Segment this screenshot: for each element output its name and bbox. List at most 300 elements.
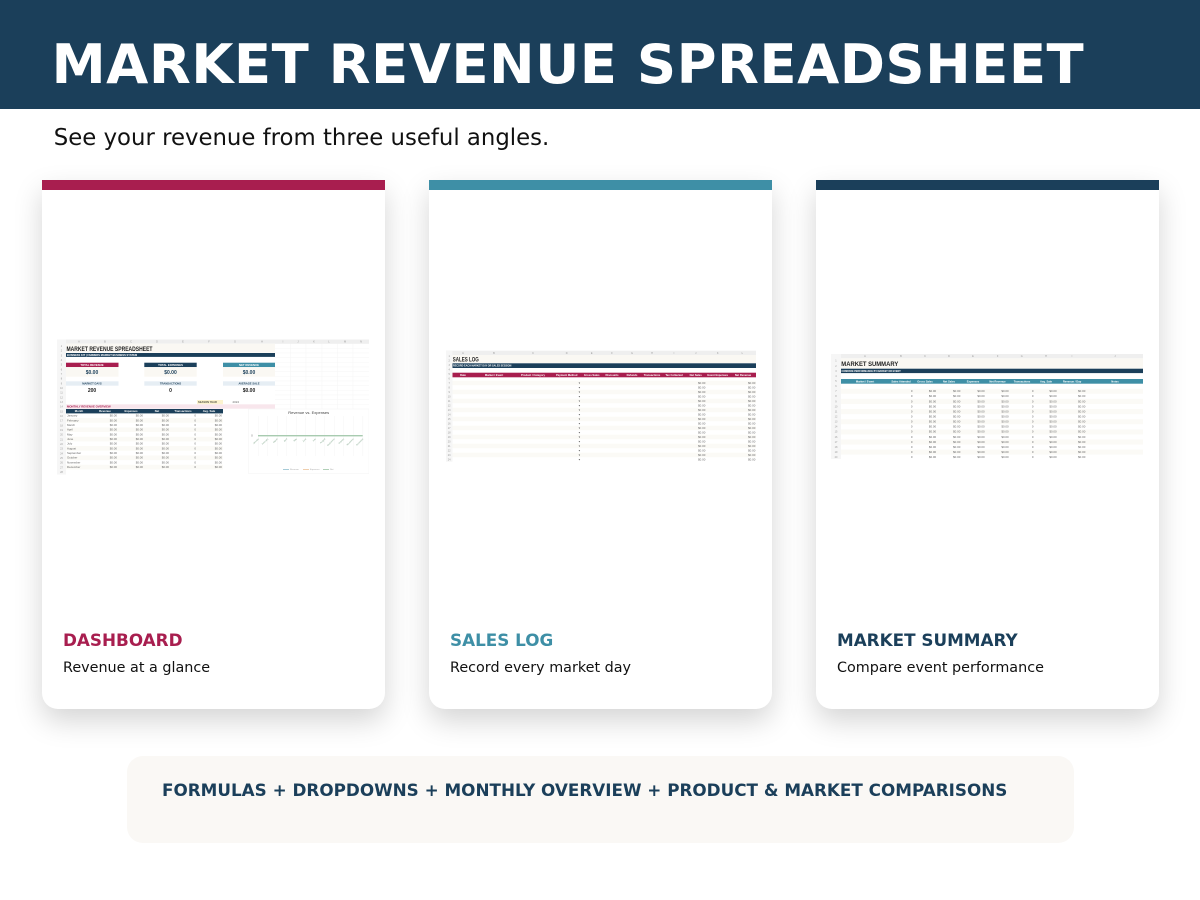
KPI: transactions: TRANSACTIONS — [160, 382, 181, 386]
spreadsheet screenshot: market summary: 2 — [835, 365, 837, 368]
monthly overview table: 0 — [194, 451, 196, 455]
table rows: market summary: 0 — [1032, 389, 1034, 393]
table rows: sales log: $0.00 — [698, 394, 706, 398]
spreadsheet screenshot: sales log: SALES LOG — [453, 357, 479, 363]
line chart: revenue vs expenses: October — [338, 437, 345, 445]
spreadsheet screenshot: dashboard: 23 — [60, 448, 63, 451]
table rows: market summary: $0.00 — [953, 450, 961, 454]
monthly overview heading: MONTHLY REVENUE OVERVIEW — [67, 405, 111, 409]
table header: market summary: Avg. Sale — [1040, 379, 1053, 383]
table rows: sales log: ▾ — [579, 404, 581, 408]
monthly overview table: $0.00 — [215, 423, 222, 427]
table header: sales log — [452, 373, 756, 377]
spreadsheet screenshot: dashboard: 21 — [60, 438, 63, 441]
spreadsheet screenshot: sales log: 3 — [449, 364, 451, 367]
table rows: market summary: $0.00 — [1078, 430, 1086, 434]
line chart: revenue vs expenses — [248, 409, 369, 474]
table header: market summary: Transactions — [1014, 379, 1031, 383]
table rows: market summary: $0.00 — [953, 435, 961, 439]
table rows: sales log: $0.00 — [748, 458, 756, 462]
table header: sales log: Net Revenue — [735, 373, 752, 377]
spreadsheet screenshot: market summary: MARKET SUMMARY — [841, 362, 898, 368]
monthly overview table: $0.00 — [110, 451, 117, 455]
table rows: sales log: $0.00 — [748, 453, 756, 457]
table rows: sales log: $0.00 — [698, 444, 706, 448]
spreadsheet screenshot: dashboard: 12 — [60, 396, 63, 399]
monthly overview table: $0.00 — [215, 460, 222, 464]
spreadsheet screenshot: sales log: 22 — [448, 450, 451, 452]
table rows: market summary: $0.00 — [953, 425, 961, 429]
monthly overview table: 0 — [194, 432, 196, 436]
spreadsheet screenshot: sales log: 4 — [449, 368, 451, 372]
spreadsheet screenshot: dashboard: 3 — [61, 354, 63, 357]
monthly overview table: 0 — [194, 465, 196, 469]
monthly overview table: $0.00 — [162, 432, 169, 436]
spreadsheet screenshot: sales log: 17 — [448, 427, 451, 430]
spreadsheet screenshot: sales log: 5 — [449, 373, 451, 376]
monthly overview table: $0.00 — [215, 432, 222, 436]
KPI: market days: MARKET DAYS — [82, 382, 102, 386]
table rows: market summary: $0.00 — [977, 409, 985, 413]
table rows: market summary: $0.00 — [977, 450, 985, 454]
table rows: sales log: $0.00 — [698, 453, 706, 457]
monthly overview table: $0.00 — [162, 451, 169, 455]
table rows: market summary: $0.00 — [1001, 414, 1009, 418]
season year selector — [197, 400, 239, 404]
spreadsheet screenshot: sales log: 13 — [448, 409, 451, 412]
spreadsheet screenshot: dashboard: 4 — [61, 359, 63, 362]
table rows: market summary: $0.00 — [953, 414, 961, 418]
spreadsheet screenshot: sales log: 20 — [448, 440, 451, 444]
monthly overview table: 0 — [194, 437, 196, 441]
KPI: average sale: $0.00 — [243, 388, 255, 394]
spreadsheet screenshot: sales log: K — [717, 352, 719, 355]
monthly overview table: June — [67, 437, 74, 441]
table rows: market summary: $0.00 — [977, 414, 985, 418]
table rows: sales log: $0.00 — [698, 435, 706, 439]
table rows: market summary: $0.00 — [929, 440, 937, 444]
monthly overview table: $0.00 — [110, 418, 117, 422]
spreadsheet screenshot: market summary: C — [924, 355, 926, 358]
table rows: sales log: $0.00 — [748, 386, 756, 390]
table rows: market summary: $0.00 — [1078, 420, 1086, 424]
table header: market summary: Notes — [1111, 379, 1119, 383]
spreadsheet screenshot: dashboard: N — [360, 341, 362, 344]
table rows: market summary: $0.00 — [977, 455, 985, 459]
panel accent bar: sales log — [429, 180, 772, 190]
table rows: sales log: $0.00 — [698, 430, 706, 434]
table header: market summary: Expenses — [967, 379, 980, 383]
monthly overview table: $0.00 — [136, 451, 143, 455]
table rows: market summary: $0.00 — [1049, 430, 1057, 434]
table rows: sales log: ▾ — [579, 440, 581, 444]
monthly overview table: $0.00 — [110, 460, 117, 464]
panel: sales log — [429, 180, 772, 709]
monthly overview table: $0.00 — [110, 442, 117, 446]
spreadsheet screenshot: sales log: 8 — [449, 386, 451, 390]
monthly overview table: $0.00 — [136, 418, 143, 422]
monthly overview table: $0.00 — [110, 437, 117, 441]
table rows: sales log: ▾ — [579, 390, 581, 394]
monthly overview table: $0.00 — [110, 414, 117, 418]
spreadsheet screenshot: market summary: G — [1021, 355, 1023, 358]
table rows: sales log: $0.00 — [748, 426, 756, 430]
spreadsheet screenshot: dashboard: 15 — [60, 410, 63, 413]
table rows: market summary: $0.00 — [1049, 409, 1057, 413]
table rows: market summary: $0.00 — [977, 440, 985, 444]
spreadsheet screenshot: market summary: 6 — [835, 385, 837, 388]
spreadsheet screenshot: sales log: J — [695, 352, 697, 355]
table rows: market summary: $0.00 — [1049, 420, 1057, 424]
monthly overview table: May — [67, 432, 73, 436]
table rows: market summary: $0.00 — [929, 445, 937, 449]
table rows: market summary: $0.00 — [1049, 450, 1057, 454]
KPI: net revenue: NET REVENUE — [239, 363, 259, 367]
KPI: net revenue — [223, 363, 275, 377]
table rows: market summary: 0 — [911, 399, 913, 403]
table rows: market summary: $0.00 — [929, 409, 937, 413]
monthly overview table: 0 — [194, 418, 196, 422]
table header: market summary — [841, 379, 1143, 384]
table rows: market summary: $0.00 — [1001, 440, 1009, 444]
footer feature strip — [127, 756, 1074, 843]
spreadsheet screenshot: market summary: 4 — [835, 375, 837, 378]
monthly overview heading — [66, 404, 275, 409]
spreadsheet screenshot: sales log: RECORD EACH MARKET DAY OR SALES SESSION — [453, 365, 512, 368]
spreadsheet screenshot: market summary: 7 — [835, 390, 837, 393]
table rows: market summary: $0.00 — [953, 440, 961, 444]
spreadsheet screenshot: market summary: 8 — [835, 395, 837, 398]
table rows: market summary: 0 — [911, 440, 913, 444]
monthly overview table: $0.00 — [110, 432, 117, 436]
table header: market summary: Gross Sales — [917, 379, 933, 383]
season year selector: SEASON YEAR — [198, 400, 217, 404]
table rows: market summary: $0.00 — [929, 425, 937, 429]
monthly overview table: $0.00 — [162, 460, 169, 464]
table rows: market summary: $0.00 — [1078, 404, 1086, 408]
table rows: market summary: 0 — [1032, 409, 1034, 413]
monthly overview table: 0 — [194, 460, 196, 464]
table rows: market summary: $0.00 — [1001, 450, 1009, 454]
table rows: market summary: $0.00 — [929, 455, 937, 459]
spreadsheet screenshot: market summary: 20 — [835, 456, 838, 459]
line chart: revenue vs expenses: May — [294, 438, 298, 442]
monthly overview table: $0.00 — [215, 418, 222, 422]
table rows: sales log: $0.00 — [748, 381, 756, 385]
panel accent bar: dashboard — [42, 180, 385, 190]
table rows: market summary: $0.00 — [1078, 450, 1086, 454]
monthly overview table: $0.00 — [136, 432, 143, 436]
table rows: sales log: ▾ — [579, 386, 581, 390]
table rows: market summary: $0.00 — [953, 445, 961, 449]
monthly overview table: $0.00 — [110, 465, 117, 469]
table rows: market summary: $0.00 — [1001, 455, 1009, 459]
table header: sales log: Net Sales — [690, 373, 702, 377]
table rows: sales log: $0.00 — [748, 394, 756, 398]
table rows: market summary: 0 — [1032, 414, 1034, 418]
table rows: sales log: ▾ — [579, 412, 581, 416]
KPI: total expenses: $0.00 — [164, 370, 177, 376]
table rows: market summary: $0.00 — [1001, 430, 1009, 434]
table header: sales log: Gross Sales — [584, 373, 600, 377]
spreadsheet screenshot: dashboard: 25 — [60, 457, 63, 460]
line chart: revenue vs expenses: November — [346, 437, 355, 446]
table rows: market summary: $0.00 — [1049, 440, 1057, 444]
spreadsheet screenshot: market summary: 1 — [835, 360, 837, 363]
table rows: market summary: $0.00 — [1078, 455, 1086, 459]
table rows: market summary: $0.00 — [1049, 399, 1057, 403]
table rows: market summary: $0.00 — [953, 409, 961, 413]
monthly overview table: $0.00 — [162, 437, 169, 441]
table rows: market summary: $0.00 — [1078, 435, 1086, 439]
table header: sales log: Market / Event — [485, 373, 503, 377]
spreadsheet screenshot: sales log: 1 — [449, 355, 451, 358]
monthly overview table: $0.00 — [136, 428, 143, 432]
spreadsheet screenshot: dashboard: E — [182, 341, 184, 344]
spreadsheet screenshot: dashboard: F — [208, 341, 210, 344]
monthly overview table: $0.00 — [136, 465, 143, 469]
monthly overview table: November — [67, 460, 80, 464]
table rows: market summary: 0 — [1032, 425, 1034, 429]
monthly overview table: $0.00 — [162, 456, 169, 460]
table header: sales log: Event Expenses — [707, 373, 729, 377]
monthly overview table: February — [67, 418, 79, 422]
table rows: market summary: $0.00 — [953, 404, 961, 408]
spreadsheet screenshot: market summary: COMPARE PERFORMANCE BY MARKET OR EVENT — [842, 370, 901, 373]
spreadsheet screenshot: market summary: F — [997, 355, 999, 358]
KPI: market days — [66, 381, 118, 394]
table rows: market summary: 0 — [911, 420, 913, 424]
KPI: market days: 200 — [88, 388, 96, 394]
KPI: total revenue: TOTAL REVENUE — [80, 363, 104, 367]
table rows: sales log: $0.00 — [698, 448, 706, 452]
spreadsheet screenshot: sales log: 21 — [448, 445, 451, 448]
spreadsheet screenshot: dashboard: L — [328, 341, 330, 344]
spreadsheet screenshot: sales log — [446, 350, 756, 462]
table rows: market summary: $0.00 — [1001, 399, 1009, 403]
table header: market summary: Net Sales — [943, 379, 956, 383]
spreadsheet screenshot: dashboard: 16 — [60, 415, 63, 418]
spreadsheet screenshot: dashboard: 24 — [60, 452, 63, 455]
spreadsheet screenshot: sales log: C — [532, 352, 534, 355]
KPI: total revenue — [66, 363, 118, 377]
table rows: sales log: ▾ — [579, 453, 581, 457]
table rows: market summary: 0 — [911, 430, 913, 434]
spreadsheet screenshot: market summary: 13 — [835, 420, 838, 424]
spreadsheet screenshot: sales log: G — [631, 352, 633, 355]
spreadsheet screenshot: dashboard: A — [78, 341, 80, 344]
spreadsheet screenshot: market summary: 17 — [835, 441, 838, 444]
spreadsheet screenshot: dashboard: BUSINESS KIT | FARMERS MARKET BUSINESS SYSTEM — [67, 353, 137, 357]
KPI: transactions — [144, 381, 197, 394]
spreadsheet screenshot: dashboard: 2 — [61, 350, 63, 353]
table rows: market summary: $0.00 — [929, 435, 937, 439]
table rows: sales log: ▾ — [579, 394, 581, 398]
spreadsheet screenshot: sales log: D — [566, 352, 568, 355]
spreadsheet screenshot: market summary — [831, 354, 1143, 459]
table header: market summary: Revenue / Day — [1063, 379, 1082, 383]
table rows: market summary: $0.00 — [977, 394, 985, 398]
table rows: sales log: $0.00 — [748, 399, 756, 403]
table rows: market summary: 0 — [1032, 445, 1034, 449]
table rows: market summary: $0.00 — [929, 430, 937, 434]
monthly overview table: $0.00 — [215, 442, 222, 446]
description: sales log: Record every market day — [450, 660, 631, 676]
spreadsheet screenshot: dashboard: G — [234, 341, 236, 344]
monthly overview table: August — [67, 446, 76, 450]
KPI: transactions: 0 — [169, 388, 172, 394]
table rows: market summary: $0.00 — [1078, 399, 1086, 403]
spreadsheet screenshot: market summary: 15 — [835, 431, 838, 434]
spreadsheet screenshot: dashboard: D — [156, 341, 158, 344]
table rows: market summary: 0 — [911, 455, 913, 459]
table rows: sales log: ▾ — [579, 422, 581, 426]
table rows: sales log: $0.00 — [748, 444, 756, 448]
table rows: sales log: $0.00 — [698, 408, 706, 412]
table rows: market summary: $0.00 — [953, 394, 961, 398]
monthly overview table: $0.00 — [215, 465, 222, 469]
table rows: market summary: $0.00 — [1078, 394, 1086, 398]
monthly overview table: $0.00 — [215, 446, 222, 450]
table rows: market summary: $0.00 — [929, 399, 937, 403]
monthly overview table: $0.00 — [162, 414, 169, 418]
table rows: market summary: $0.00 — [953, 430, 961, 434]
table rows: market summary: 0 — [911, 450, 913, 454]
table rows: market summary: $0.00 — [1049, 425, 1057, 429]
monthly overview table: $0.00 — [136, 456, 143, 460]
description: dashboard: Revenue at a glance — [63, 660, 210, 676]
KPI: net revenue: $0.00 — [243, 370, 255, 376]
table rows: market summary: $0.00 — [1078, 425, 1086, 429]
table rows: market summary: $0.00 — [977, 420, 985, 424]
spreadsheet screenshot: sales log: A — [462, 352, 464, 355]
table rows: market summary: $0.00 — [1001, 425, 1009, 429]
spreadsheet screenshot: sales log: 6 — [449, 378, 451, 380]
table rows: market summary: 0 — [911, 389, 913, 393]
line chart: revenue vs expenses: March — [272, 437, 279, 444]
monthly overview table: $0.00 — [215, 451, 222, 455]
table rows: market summary: $0.00 — [1049, 445, 1057, 449]
spreadsheet screenshot: market summary: 12 — [835, 416, 838, 418]
spreadsheet screenshot: dashboard: 14 — [60, 406, 63, 409]
table rows: market summary: $0.00 — [929, 404, 937, 408]
table rows: market summary: $0.00 — [953, 389, 961, 393]
spreadsheet screenshot: market summary: 10 — [835, 405, 838, 408]
description: market summary: Compare event performance — [837, 660, 1044, 676]
footer text: FORMULAS + DROPDOWNS + MONTHLY OVERVIEW + PRODUCT & MARKET COMPARISONS — [162, 780, 1007, 800]
spreadsheet screenshot: sales log: 9 — [449, 391, 451, 394]
spreadsheet screenshot: market summary: H — [1045, 355, 1047, 358]
table rows: sales log: $0.00 — [748, 435, 756, 439]
spreadsheet screenshot: dashboard: 13 — [60, 401, 63, 404]
spreadsheet screenshot: sales log: 11 — [448, 400, 451, 403]
monthly overview table: Transactions — [174, 409, 192, 413]
spreadsheet screenshot: market summary: I — [1072, 355, 1073, 358]
panel: market summary — [816, 180, 1159, 709]
table rows: sales log: $0.00 — [748, 404, 756, 408]
spreadsheet screenshot: market summary: 16 — [835, 436, 838, 439]
line chart: revenue vs expenses: December — [356, 437, 365, 446]
spreadsheet screenshot: dashboard: 22 — [60, 443, 63, 446]
KPI: total expenses: TOTAL EXPENSES — [158, 363, 183, 367]
table rows: sales log: ▾ — [579, 426, 581, 430]
line chart: revenue vs expenses: 0 — [251, 434, 253, 438]
spreadsheet screenshot: sales log: 15 — [448, 418, 451, 421]
table rows: market summary: 0 — [1032, 404, 1034, 408]
spreadsheet screenshot: dashboard: 26 — [60, 462, 63, 465]
monthly overview table: December — [67, 465, 80, 469]
table header: sales log: Product / Category — [521, 373, 546, 377]
spreadsheet screenshot: dashboard: 9 — [61, 382, 63, 385]
spreadsheet screenshot: market summary: E — [972, 355, 974, 358]
table rows: market summary: $0.00 — [977, 435, 985, 439]
table rows: sales log: $0.00 — [748, 440, 756, 444]
spreadsheet screenshot: dashboard: 7 — [61, 373, 63, 376]
spreadsheet screenshot: sales log: I — [674, 352, 675, 355]
table rows: market summary: 0 — [911, 409, 913, 413]
spreadsheet screenshot: sales log: 12 — [448, 404, 451, 408]
monthly overview table: January — [67, 414, 78, 418]
table header: market summary: Market / Event — [856, 379, 874, 383]
spreadsheet screenshot: market summary: D — [948, 355, 950, 358]
table rows: market summary: $0.00 — [929, 450, 937, 454]
spreadsheet screenshot: dashboard: 28 — [60, 471, 63, 474]
KPI: total expenses — [144, 363, 197, 377]
spreadsheet screenshot: dashboard: C — [130, 341, 132, 344]
monthly overview table: $0.00 — [136, 460, 143, 464]
table rows: market summary: $0.00 — [1049, 394, 1057, 398]
spreadsheet screenshot: market summary: A — [864, 355, 866, 358]
monthly overview table: 0 — [194, 456, 196, 460]
table rows: market summary: $0.00 — [1078, 389, 1086, 393]
table rows: market summary: $0.00 — [929, 414, 937, 418]
monthly overview table: March — [67, 423, 75, 427]
line chart: revenue vs expenses: February — [261, 437, 270, 446]
monthly overview table: $0.00 — [110, 428, 117, 432]
table rows: market summary: $0.00 — [1049, 414, 1057, 418]
line chart: revenue vs expenses: August — [320, 437, 326, 444]
monthly overview table: $0.00 — [110, 446, 117, 450]
table rows: sales log: ▾ — [579, 417, 581, 421]
table rows: sales log: $0.00 — [698, 399, 706, 403]
spreadsheet screenshot: sales log: 23 — [448, 454, 451, 457]
table rows: sales log: ▾ — [579, 408, 581, 412]
table rows: market summary: $0.00 — [1049, 455, 1057, 459]
table rows: sales log: $0.00 — [698, 426, 706, 430]
table rows: market summary: $0.00 — [1049, 389, 1057, 393]
table rows: sales log: $0.00 — [698, 386, 706, 390]
spreadsheet screenshot: market summary: 9 — [835, 400, 837, 403]
spreadsheet screenshot: dashboard: 5 — [61, 364, 63, 367]
table rows: sales log: $0.00 — [748, 422, 756, 426]
line chart: revenue vs expenses: July — [313, 438, 317, 442]
monthly overview table: $0.00 — [215, 428, 222, 432]
spreadsheet screenshot: dashboard: I — [283, 341, 284, 344]
table rows: market summary: $0.00 — [953, 455, 961, 459]
spreadsheet screenshot: market summary: 5 — [835, 380, 837, 383]
table rows: market summary: $0.00 — [953, 399, 961, 403]
spreadsheet screenshot: sales log: 2 — [449, 360, 451, 362]
line chart: revenue vs expenses: Net — [330, 468, 334, 471]
table rows: sales log: $0.00 — [748, 430, 756, 434]
table rows: market summary: $0.00 — [1001, 394, 1009, 398]
table rows: sales log: $0.00 — [748, 408, 756, 412]
table header: sales log: Refunds — [627, 373, 638, 377]
panel accent bar: market summary — [816, 180, 1159, 190]
monthly overview table: $0.00 — [136, 414, 143, 418]
monthly overview table: October — [67, 456, 77, 460]
monthly overview table: $0.00 — [136, 446, 143, 450]
